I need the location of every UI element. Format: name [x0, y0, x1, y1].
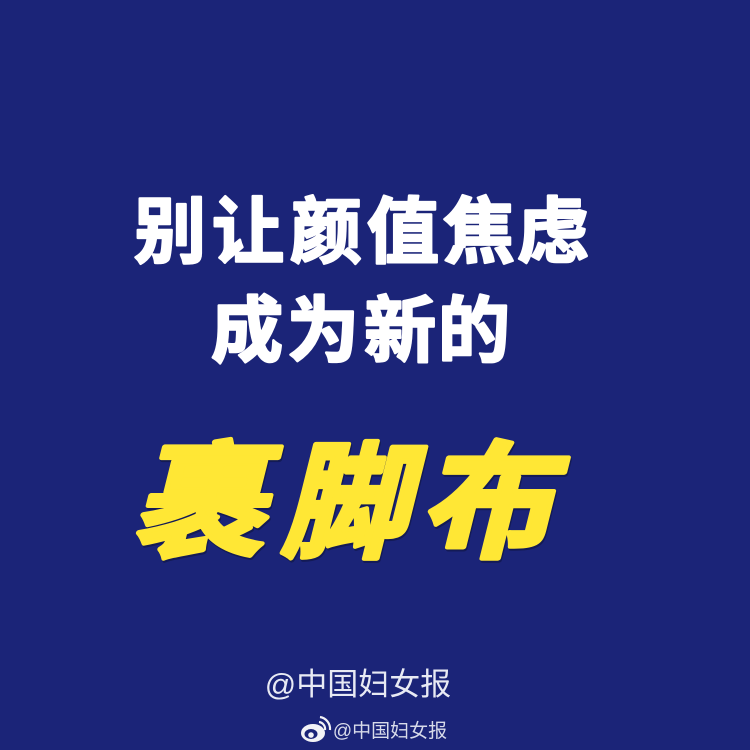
keyword shadow: 布	[414, 435, 582, 576]
heading line 1: 颜	[290, 193, 362, 273]
keyword shadow	[126, 435, 582, 577]
heading line 2: 成	[211, 292, 283, 372]
heading line 1: 焦	[443, 193, 515, 273]
keyword shadow: 脚	[275, 436, 436, 577]
keyword fill: 脚	[274, 434, 435, 575]
heading line 1: 虑	[517, 193, 589, 273]
highlighted keyword	[125, 433, 582, 577]
keyword fill: 裹	[125, 433, 293, 574]
watermark	[301, 717, 447, 742]
heading line 1: 值	[367, 193, 439, 273]
heading line 2: 的	[438, 292, 510, 372]
heading line 1	[134, 193, 589, 273]
source credit: @中国妇女报	[265, 667, 451, 702]
keyword fill	[125, 433, 581, 575]
heading line 2: 为	[287, 292, 359, 372]
heading line 1: 别	[134, 193, 206, 273]
heading line 2: 新	[364, 292, 436, 372]
keyword shadow: 裹	[126, 435, 294, 576]
watermark text: @中国妇女报	[333, 720, 447, 742]
keyword fill: 布	[413, 433, 581, 574]
icon: weibo logo	[301, 717, 330, 742]
heading line 2	[211, 292, 510, 372]
heading line 1: 让	[212, 193, 284, 273]
